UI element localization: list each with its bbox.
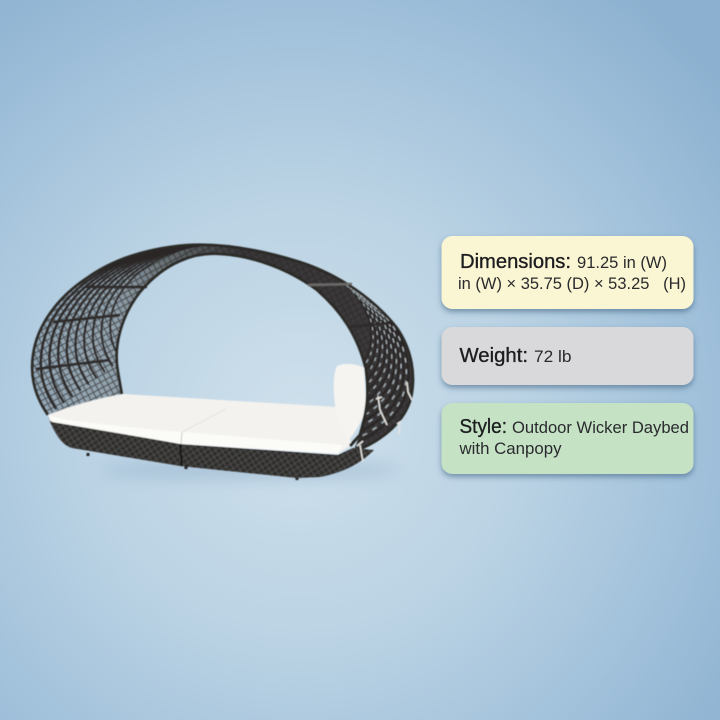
floor shadow under daybed [100,461,400,479]
weight heading and value: 72 lb [534,348,572,366]
canopy cross bars [36,284,390,369]
style heading and value: with Canpopy [458,440,562,458]
dimensions heading and value [458,251,686,293]
weight heading and value [460,345,572,367]
base frame [48,415,374,480]
seat cushions [48,394,352,454]
style heading and value: Style: [460,416,507,438]
white cushion ties [357,382,412,462]
rim over pillow [350,370,368,446]
back pillow [334,364,366,440]
info card: dimensions [442,236,694,309]
dimensions heading and value: 91.25 in (W) [577,254,667,272]
canopy outer and inner rims [32,245,413,452]
weight heading and value: Weight: [460,345,528,367]
style heading and value [458,416,689,458]
canopy arch [30,242,416,450]
dimensions heading and value: Dimensions: [460,251,571,273]
info card: weight [442,327,694,385]
dimensions heading and value: in (W) × 35.75 (D) × 53.25 (H) [458,275,686,293]
product image: wicker daybed with canopy [20,235,420,480]
info card: style [442,403,694,474]
style heading and value: Outdoor Wicker Daybed [512,419,689,437]
